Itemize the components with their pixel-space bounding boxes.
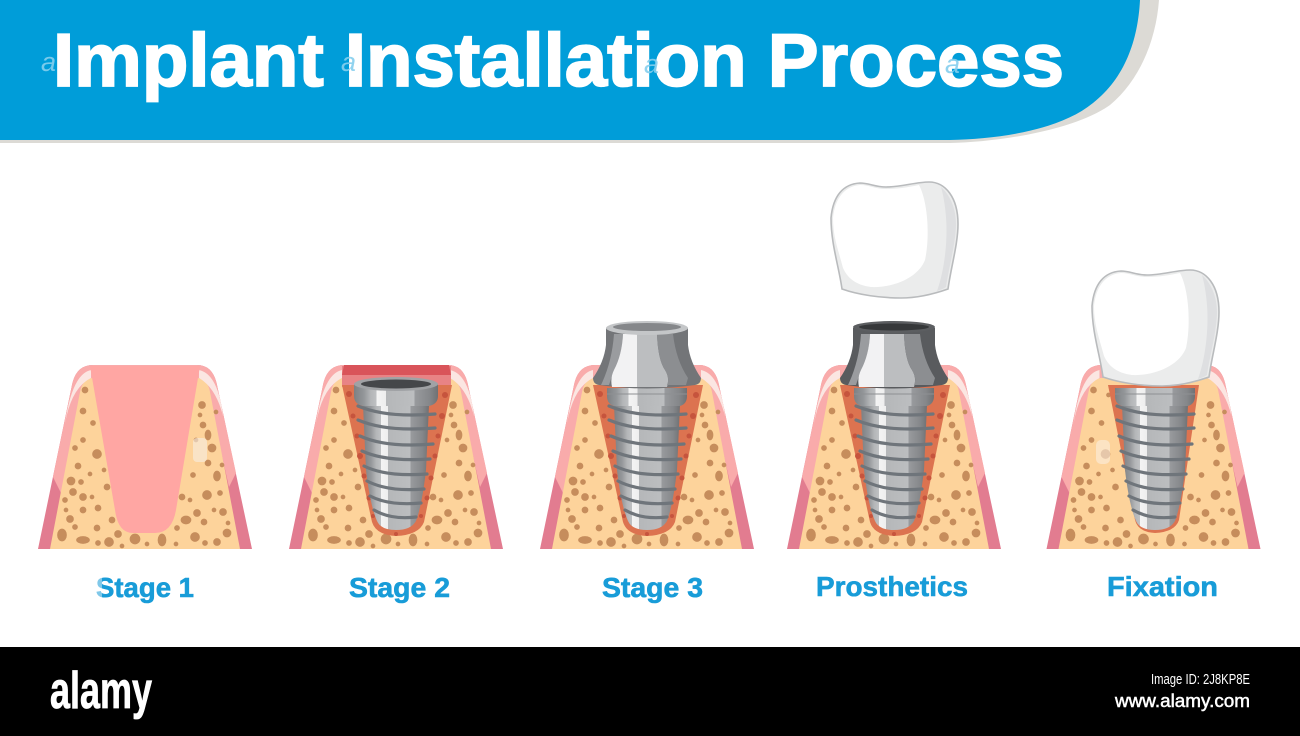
abutment (840, 321, 948, 388)
narrow socket (1108, 385, 1199, 533)
title: Implant Installation Process (53, 18, 1064, 102)
stage 2 illustration (289, 365, 503, 549)
implant screw (354, 377, 438, 530)
label: fixation: Fixation (1107, 571, 1218, 602)
floating crown (831, 182, 958, 298)
implant screw (1115, 388, 1195, 530)
watermark smudge (193, 438, 207, 462)
implant screw (856, 405, 933, 530)
prosthetics illustration (787, 321, 1001, 549)
fitted crown (1092, 270, 1219, 386)
stage 1 illustration (38, 365, 252, 549)
watermark smudge (1096, 440, 1110, 464)
watermark ghosts on title: a (341, 47, 356, 77)
watermark ghosts on title: a (644, 49, 659, 79)
label watermark ghost (95, 574, 102, 598)
footer logo: alamy (50, 662, 152, 720)
watermark ghosts on title: a (41, 47, 56, 77)
watermark ghosts on title (41, 47, 960, 79)
label: stage 2: Stage 2 (349, 572, 450, 603)
bone socket (593, 385, 703, 536)
label: stage 3: Stage 3 (602, 572, 703, 603)
drilled socket (342, 385, 452, 536)
label: prosthetics: Prosthetics (816, 571, 968, 602)
footer bar (0, 647, 1300, 736)
empty implant socket (90, 366, 200, 533)
implant screw (609, 405, 686, 530)
website: www.alamy.com (1114, 691, 1250, 711)
header banner (0, 0, 1159, 143)
bone socket (840, 385, 950, 536)
stage 3 illustration (540, 321, 754, 549)
fixation illustration (1046, 270, 1260, 549)
watermark ghosts on title: a (945, 49, 960, 79)
abutment (593, 321, 701, 388)
stage labels (96, 571, 1218, 603)
label: stage 1: Stage 1 (96, 572, 194, 603)
image id: Image ID: 2J8KP8E (1151, 671, 1250, 688)
